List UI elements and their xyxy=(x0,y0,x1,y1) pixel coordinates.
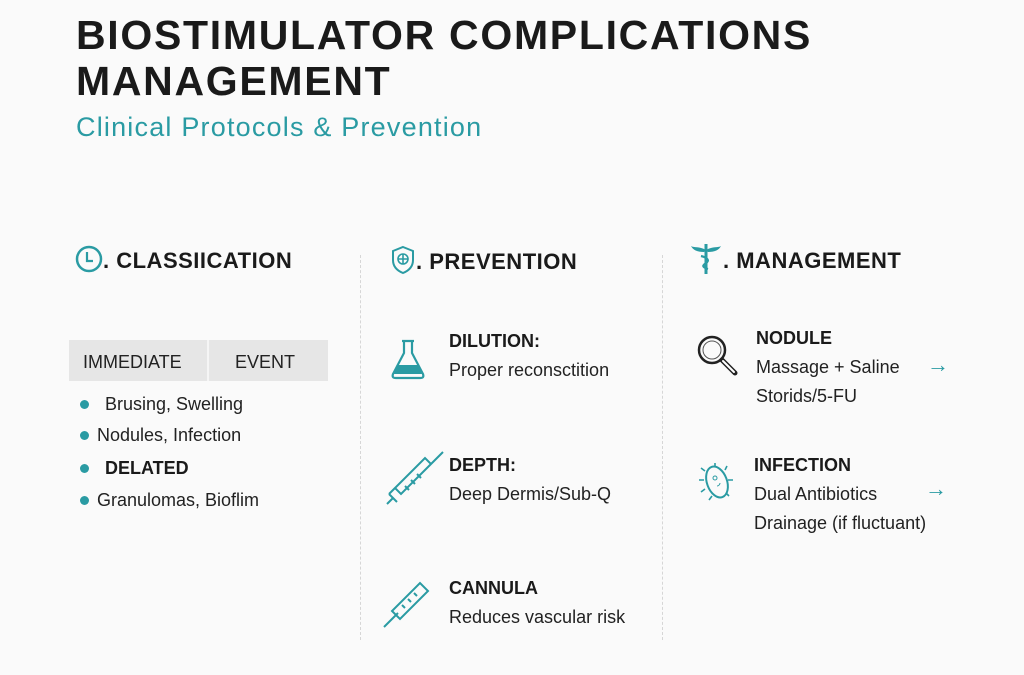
title: BIOSTIMULATOR COMPLICATIONS xyxy=(76,12,812,58)
icon: flask xyxy=(392,340,424,380)
item: dilution: DILUTION: xyxy=(449,331,540,351)
heading: prevention: . PREVENTION xyxy=(416,249,577,274)
item: depth: Deep Dermis/Sub-Q xyxy=(449,484,611,504)
item: infection xyxy=(754,455,926,533)
item: infection: Drainage (if fluctuant) xyxy=(754,513,926,533)
item: dilution xyxy=(449,331,609,380)
item: depth: DEPTH: xyxy=(449,455,516,475)
heading: management: . MANAGEMENT xyxy=(723,248,901,273)
bullet list: Brusing, Swelling xyxy=(105,394,243,414)
item: cannula xyxy=(449,578,626,627)
item: infection: INFECTION xyxy=(754,455,851,475)
item: nodule: NODULE xyxy=(756,328,832,348)
item: cannula: Reduces vascular risk xyxy=(449,607,625,627)
table header: EVENT xyxy=(235,352,295,372)
item: dilution: Proper reconsctition xyxy=(449,360,609,380)
item: nodule: Massage + Saline xyxy=(756,357,900,377)
icon: syringe xyxy=(386,451,444,505)
table header: IMMEDIATE xyxy=(83,352,182,372)
subtitle: Clinical Protocols & Prevention xyxy=(76,112,482,142)
title: MANAGEMENT xyxy=(76,58,391,104)
bullet list: Nodules, Infection xyxy=(97,425,241,445)
arrow: → xyxy=(925,476,947,501)
bullet list: DELATED xyxy=(105,458,189,478)
item: nodule xyxy=(756,328,900,406)
table header xyxy=(69,340,328,381)
icon: cannula xyxy=(383,582,430,628)
item: depth xyxy=(449,455,611,504)
item: nodule: Storids/5-FU xyxy=(756,386,857,406)
title xyxy=(76,12,812,104)
icon: bacteria xyxy=(699,463,733,500)
arrow: → xyxy=(927,352,949,377)
heading: classification: . CLASSIICATION xyxy=(103,248,292,273)
panel: management xyxy=(691,244,949,533)
panel: prevention xyxy=(383,246,626,628)
bullet list xyxy=(80,394,259,510)
panel: classification xyxy=(69,246,328,510)
bullet list: Granulomas, Bioflim xyxy=(97,490,259,510)
icon: magnifier xyxy=(698,336,738,376)
item: cannula: CANNULA xyxy=(449,578,538,598)
item: infection: Dual Antibiotics xyxy=(754,484,877,504)
